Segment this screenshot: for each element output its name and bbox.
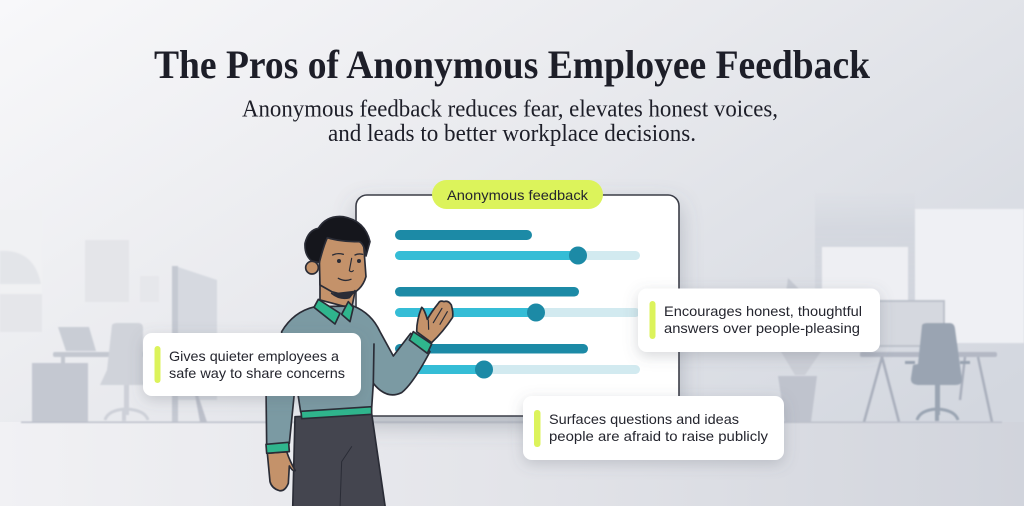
right cuff <box>409 332 432 353</box>
left hand <box>267 452 295 491</box>
left desk with laptop, cabinet and chair <box>32 323 148 422</box>
left sleeve <box>266 387 295 445</box>
face details <box>333 254 363 280</box>
trouser crease <box>340 447 352 506</box>
subtitle <box>242 96 778 147</box>
callout: quieter employees: Gives quieter employees a <box>169 348 339 364</box>
callout: questions and ideas <box>523 396 784 460</box>
callout: quieter employees <box>143 333 361 396</box>
right wall panels <box>815 190 1024 345</box>
left large monitor <box>172 266 217 422</box>
panel: anonymous feedback board <box>356 180 679 416</box>
trousers <box>293 413 386 506</box>
collar <box>314 299 353 324</box>
subtitle: Anonymous feedback reduces fear, elevates honest voices, <box>242 96 778 122</box>
potted plant <box>778 278 822 422</box>
feedback row 2 <box>395 287 640 322</box>
callout: honest answers: answers over people-pleasing <box>664 320 860 336</box>
callout: questions and ideas: Surfaces questions and ideas <box>549 411 739 427</box>
floor line <box>21 422 1002 423</box>
left wall art <box>0 210 159 332</box>
board label pill: Anonymous feedback <box>447 187 589 203</box>
finger lines <box>428 308 447 329</box>
sweater <box>282 306 430 412</box>
sweater hem <box>301 407 372 419</box>
callout: honest answers: Encourages honest, thoughtful <box>664 303 862 319</box>
floor <box>0 422 1024 506</box>
board background <box>356 195 679 416</box>
sweater inner line <box>371 344 376 383</box>
feedback row 1 <box>395 230 640 264</box>
subtitle: and leads to better workplace decisions. <box>328 121 696 147</box>
feedback row 3 <box>395 344 640 378</box>
background office scene <box>0 190 1024 423</box>
left cuff <box>266 442 289 453</box>
right desk with monitor and chair <box>860 301 997 422</box>
raised hand <box>417 301 453 343</box>
title: The Pros of Anonymous Employee Feedback <box>154 42 871 87</box>
callout: honest answers <box>638 288 880 352</box>
neck and head <box>305 216 370 308</box>
board label pill <box>432 180 603 209</box>
callout: quieter employees: safe way to share concerns <box>169 365 345 381</box>
callout: questions and ideas: people are afraid to raise publicly <box>549 428 768 444</box>
illustration: presenter <box>266 216 453 506</box>
